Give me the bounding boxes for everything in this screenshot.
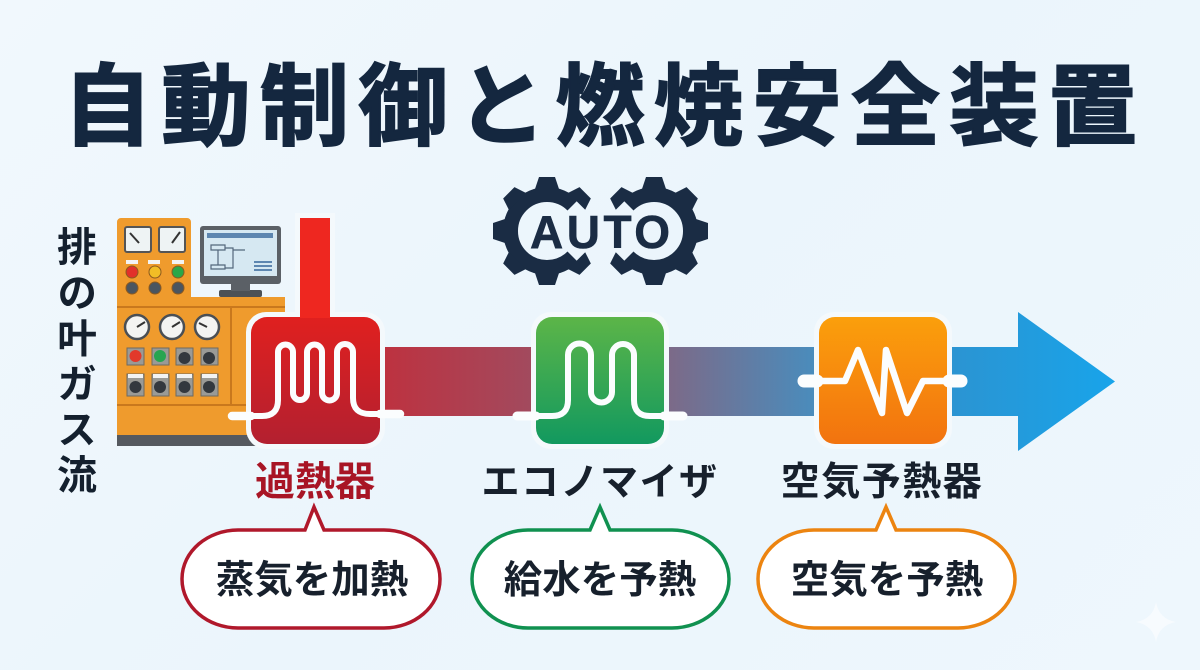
flow band: second segment — [669, 347, 814, 416]
callout: air preheater — [758, 507, 1015, 628]
economizer coil — [517, 344, 683, 416]
AUTO text: AUTO — [530, 206, 670, 258]
callout: air preheater: 空気を予熱 — [791, 559, 983, 602]
title: 自動制御と燃焼安全装置 — [63, 57, 1146, 157]
label: economizer: エコノマイザ — [481, 462, 718, 504]
callout: superheater: 蒸気を加熱 — [216, 559, 408, 602]
flow band: first segment — [385, 347, 531, 416]
air preheater box — [804, 312, 961, 449]
icon: AUTO gears — [493, 177, 708, 285]
icon: monitor — [200, 226, 281, 297]
icon: control panel — [117, 218, 285, 446]
chimney — [300, 218, 330, 318]
flow arrow — [952, 312, 1115, 451]
preheater pulse line — [804, 350, 961, 413]
economizer box — [517, 312, 683, 449]
label: superheater: 過熱器 — [255, 460, 375, 504]
label: air preheater: 空気予熱器 — [781, 461, 983, 504]
callout: economizer — [472, 507, 729, 628]
callout: economizer: 給水を予熱 — [504, 559, 696, 602]
sparkle — [1136, 602, 1176, 642]
superheater coil — [231, 344, 401, 416]
vertical label: exhaust gas flow: 排の叶ガス流 — [51, 226, 95, 500]
callout: superheater — [182, 507, 440, 628]
superheater box — [231, 213, 401, 449]
